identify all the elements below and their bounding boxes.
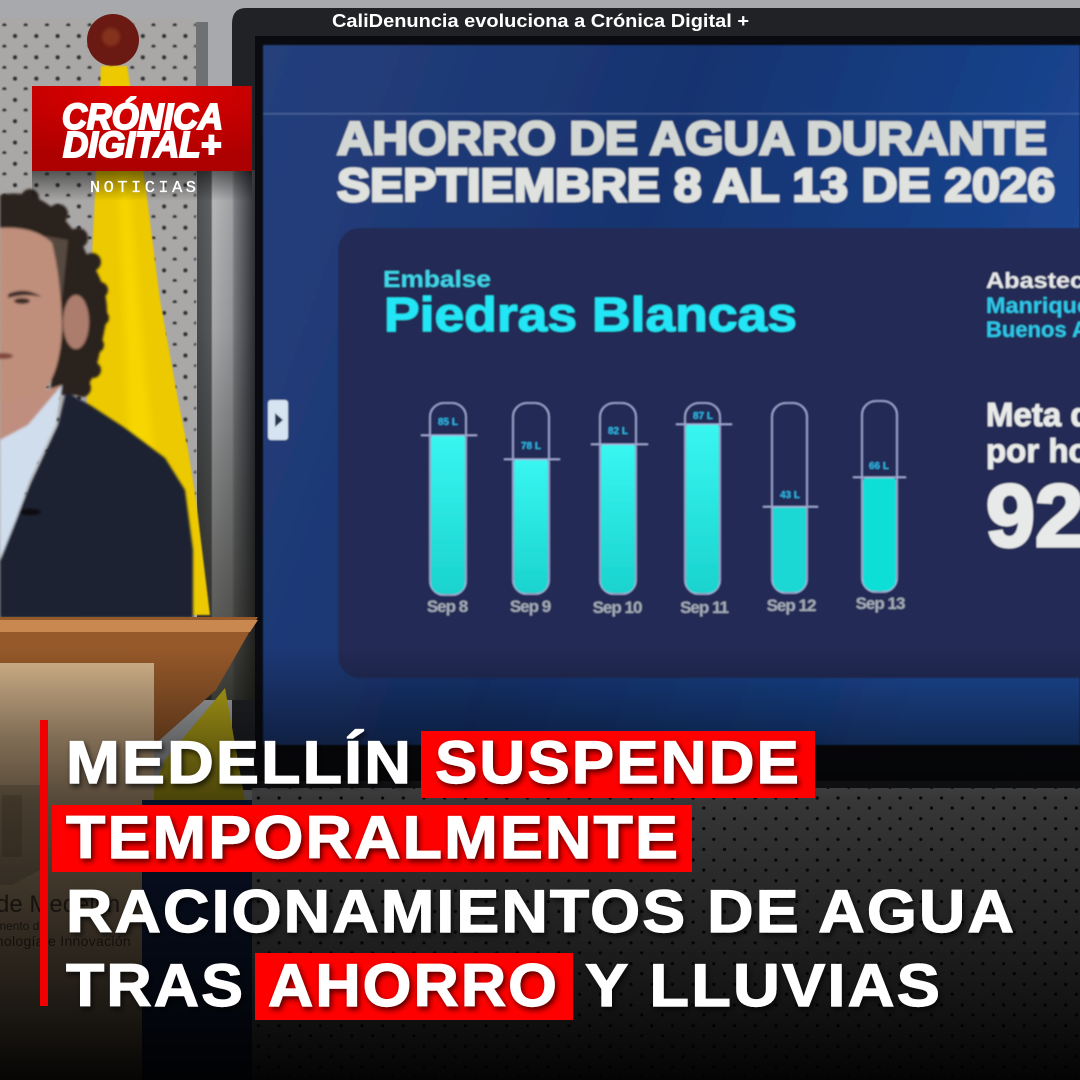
- lectern text: [0, 891, 131, 949]
- logo shadow band: [32, 171, 252, 201]
- pegboard panel: [0, 18, 208, 618]
- headline words: TRAS: [66, 952, 245, 1019]
- bar: Sep 11 87 L: 87 L: [693, 411, 713, 422]
- headline words: MEDELLÍN: [66, 729, 413, 796]
- highlight: TEMPORALMENTE: [52, 805, 692, 872]
- reservoir heading: Embalse: [383, 266, 491, 292]
- bar: Sep 10 82 L: 82 L: [608, 426, 628, 437]
- shirt: [0, 385, 62, 565]
- logo wordmark: CRÓNICA: [62, 96, 223, 137]
- reservoir heading: [383, 266, 797, 342]
- bar: Sep 12 43 L: Sep 12: [767, 596, 816, 615]
- headline words: AHORRO: [268, 952, 559, 1019]
- bar: Sep 10 82 L: Sep 10: [593, 598, 642, 617]
- screen glare line: [263, 113, 1080, 114]
- logo red box: [32, 86, 252, 171]
- hair: [0, 189, 109, 397]
- bar: Sep 11 87 L: [676, 403, 732, 617]
- dark bottom gradient: [0, 600, 1080, 1080]
- slide tab icon: [268, 400, 288, 440]
- ear: [63, 295, 89, 349]
- bar: Sep 8 85 L: 85 L: [438, 417, 458, 428]
- bar: Sep 11 87 L: Sep 11: [680, 598, 728, 617]
- bar: Sep 10 82 L: [591, 403, 648, 617]
- bar: Sep 9 78 L: Sep 9: [510, 597, 551, 616]
- highlight: SUSPENDE: [421, 731, 815, 798]
- neck: [0, 385, 62, 470]
- microphone: [19, 508, 41, 516]
- mouth: [0, 353, 13, 359]
- bar: Sep 8 85 L: Sep 8: [427, 597, 468, 616]
- logo wordmark: DIGITAL+: [63, 124, 221, 165]
- bar: Sep 12 43 L: 43 L: [780, 490, 800, 501]
- bar: Sep 9 78 L: [504, 403, 560, 616]
- bar: Sep 9 78 L: 78 L: [521, 441, 541, 452]
- headline: [52, 729, 1016, 1020]
- face: [0, 228, 62, 425]
- flag pole finial: [87, 14, 139, 66]
- reservoir heading: Piedras Blancas: [384, 289, 797, 342]
- yellow flag: [80, 66, 210, 615]
- lectern crest: [0, 785, 40, 885]
- headline accent bar: [40, 720, 48, 1006]
- bar: Sep 12 43 L: [763, 403, 818, 615]
- headline words: [66, 729, 1016, 1019]
- headline words: RACIONAMIENTOS DE AGUA: [66, 878, 1016, 945]
- bar: Sep 13 66 L: [853, 401, 906, 613]
- lower flag bands: [136, 688, 255, 1080]
- eye: [8, 291, 42, 304]
- speaker: [0, 189, 193, 618]
- screen title: SEPTIEMBRE 8 AL 13 DE 2026: [337, 159, 1055, 211]
- screen title: AHORRO DE AGUA DURANTE: [337, 112, 1047, 164]
- lectern: [0, 617, 258, 1080]
- supply text: [986, 268, 1080, 342]
- screen navy panel: [338, 228, 1080, 678]
- bar: Sep 8 85 L: [421, 403, 477, 616]
- goal text: [986, 396, 1080, 565]
- forehead hair shadow: [45, 236, 68, 300]
- jacket: [0, 392, 193, 618]
- logo subtitle: NOTICIAS: [90, 179, 196, 198]
- bar: Sep 13 66 L: 66 L: [869, 461, 889, 472]
- highlight: AHORRO: [255, 953, 573, 1020]
- headline words: SUSPENDE: [435, 729, 801, 796]
- brand logo: [32, 86, 252, 201]
- bar: Sep 13 66 L: Sep 13: [856, 594, 905, 613]
- screen title: [337, 112, 1055, 211]
- metal side column: [197, 170, 255, 700]
- top announcement text: CaliDenuncia evoluciona a Crónica Digital +: [332, 11, 749, 31]
- monitor screen: [263, 45, 1080, 745]
- bar chart: water saved per day: [421, 401, 906, 617]
- lower pegboard: [142, 788, 1080, 1080]
- monitor frame: [232, 8, 1080, 790]
- headline words: TEMPORALMENTE: [66, 804, 680, 871]
- logo wordmark: [62, 96, 223, 165]
- headline words: Y LLUVIAS: [585, 952, 942, 1019]
